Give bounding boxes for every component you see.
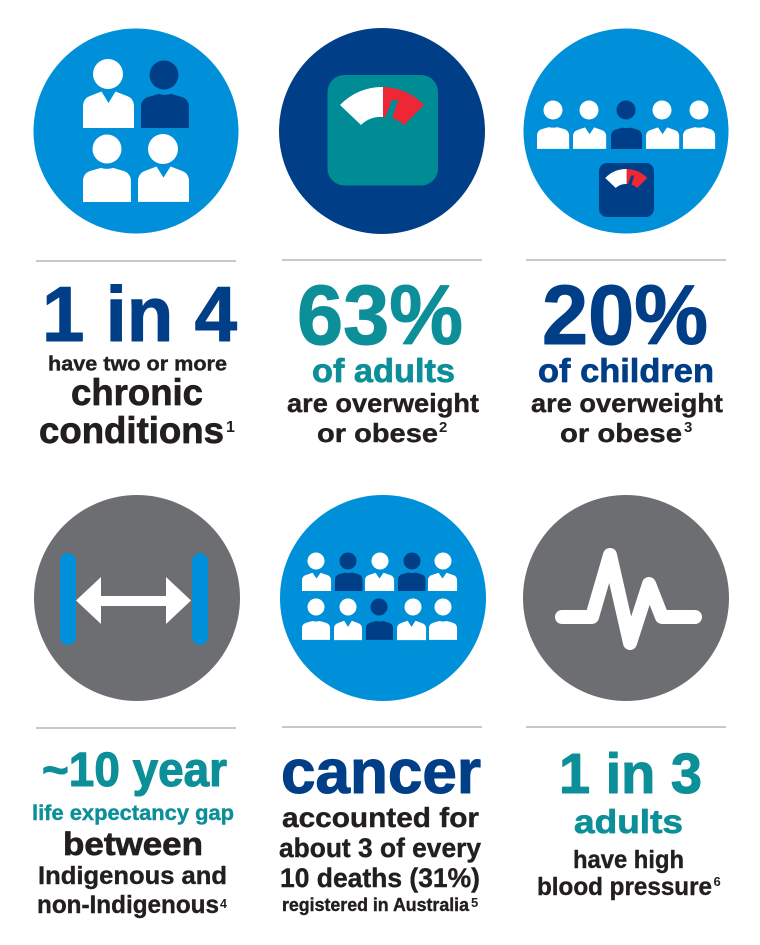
icon: heartbeat line — [523, 495, 729, 701]
text: of adults: of adults — [312, 352, 455, 389]
text: registered in Australia with reference: registered in Australia — [282, 895, 470, 915]
panel: life expectancy gap — [32, 495, 240, 919]
heading: cancer: cancer — [281, 738, 481, 807]
text: 10 deaths (31%): 10 deaths (31%) — [280, 863, 480, 893]
text: life expectancy gap: life expectancy gap — [32, 802, 234, 825]
text: accounted for: accounted for — [282, 802, 479, 833]
text: blood pressure with reference: blood pressure — [537, 873, 712, 901]
panel: adults overweight — [279, 28, 485, 448]
text: Indigenous and: Indigenous and — [38, 862, 227, 890]
panel: cancer — [279, 495, 486, 915]
icon: five people and small scale — [524, 28, 728, 234]
text: chronic: chronic — [71, 372, 203, 413]
text: blood pressure with reference: 6 — [714, 874, 721, 889]
text: are overweight: are overweight — [287, 388, 479, 418]
heading: 1 in 4: 1 in 4 — [42, 270, 237, 358]
icon: four people — [34, 28, 238, 234]
text: non-Indigenous with reference: non-Indigenous — [37, 891, 219, 919]
text: between: between — [63, 826, 203, 862]
text: conditions with reference: 1 — [226, 419, 235, 436]
text: or obese with reference: 2 — [439, 419, 447, 436]
heading: 1 in 3: 1 in 3 — [559, 742, 702, 806]
text: or obese with reference: or obese — [560, 418, 682, 448]
text: or obese with reference: 3 — [684, 419, 692, 436]
heading: ~10 year: ~10 year — [42, 744, 227, 797]
text: about 3 of every: about 3 of every — [279, 833, 481, 863]
panel: high blood pressure — [523, 495, 729, 901]
text: non-Indigenous with reference: 4 — [220, 897, 227, 911]
icon: ten people — [280, 495, 486, 701]
text: have two or more: have two or more — [48, 354, 227, 376]
heading: 63%: 63% — [297, 268, 463, 362]
panel: children overweight — [524, 28, 728, 448]
text: registered in Australia with reference: 5 — [471, 895, 478, 910]
text: or obese with reference: or obese — [317, 418, 438, 448]
text: have high: have high — [573, 846, 684, 874]
text: of children: of children — [538, 352, 714, 389]
heading: 20%: 20% — [542, 268, 708, 362]
text: adults: adults — [574, 803, 683, 840]
text: conditions with reference: conditions — [39, 410, 224, 451]
panel: chronic conditions — [34, 28, 238, 451]
icon: gap arrow — [34, 495, 240, 701]
icon: scale — [279, 28, 485, 234]
text: are overweight: are overweight — [531, 388, 723, 418]
